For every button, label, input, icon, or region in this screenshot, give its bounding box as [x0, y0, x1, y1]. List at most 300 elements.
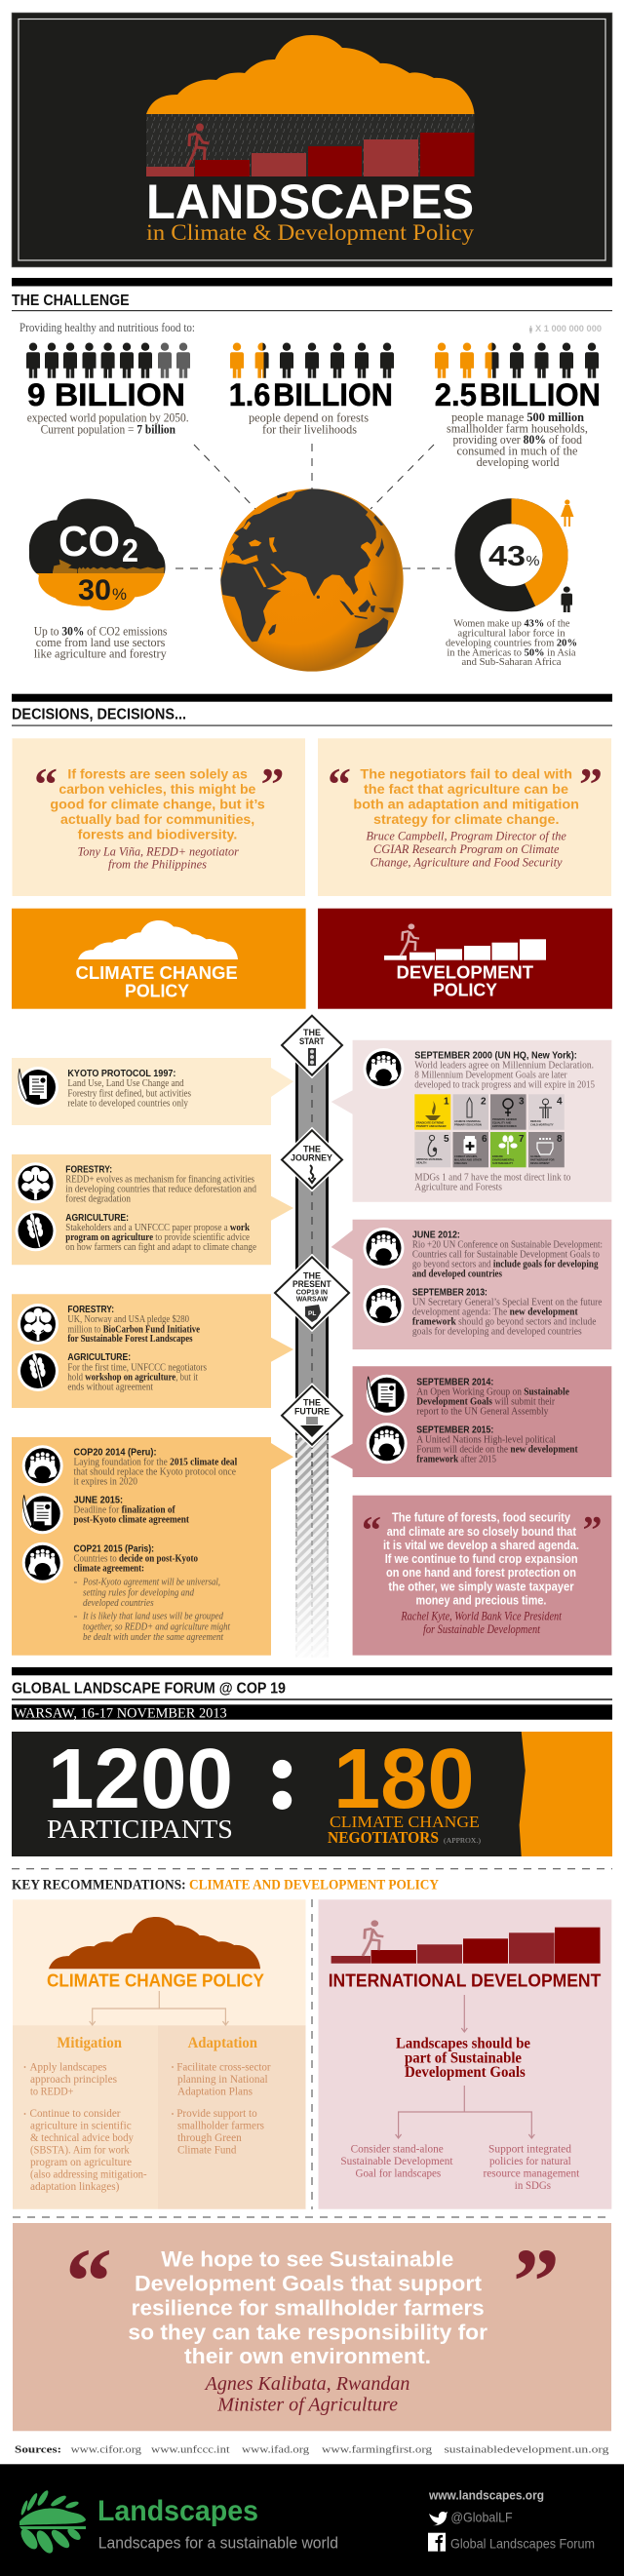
MDG 1 [414, 1094, 450, 1130]
panel: COP20 and COP21: that should replace the Kyoto protocol once [74, 1467, 236, 1478]
stat: 2.5 billion: smallholder farm households, [447, 421, 588, 435]
women text [446, 618, 577, 668]
column: adaptation: Climate Fund [177, 2142, 236, 2156]
icon: CO2 cloud: 2 [122, 532, 138, 568]
quote panel: Tony La Viña: good for climate change, but it’s [50, 797, 265, 812]
women text: and Sub-Saharan Africa [462, 656, 562, 668]
MDG 6: 6 [482, 1134, 488, 1145]
column: mitigation: Continue to consider [29, 2106, 121, 2120]
panel: future milestones: report to the UN General Assembly [416, 1407, 549, 1418]
icon: CO2 cloud: % [112, 585, 127, 604]
stat: 9 billion: Current population = 7 billion [41, 422, 176, 436]
milestone: the future: THE [303, 1398, 321, 1409]
panel: Rio+20 and Special Event: and developed countries [412, 1268, 502, 1279]
milestone: the journey: JOURNEY [291, 1152, 333, 1163]
milestone: the present [275, 1257, 349, 1329]
stat: 1.6 billion: 1.6 BILLION [229, 377, 393, 412]
column: mitigation: (SBSTA). Aim for work [30, 2142, 130, 2156]
icon: brown cloud [49, 1917, 260, 1969]
MDG 7: 7 [519, 1134, 525, 1145]
icon: tractor and crop silhouette [53, 560, 164, 573]
date banner: WARSAW, 16-17 NOVEMBER 2013 [14, 1705, 227, 1721]
milestone: the journey: THE [303, 1145, 321, 1155]
heading: key recommendations: KEY RECOMMENDATIONS: [12, 1877, 186, 1893]
women text: Women make up 43% of the [453, 618, 570, 630]
MDG 1: ERADICATE EXTREME [416, 1121, 444, 1125]
milestone: the journey [282, 1130, 342, 1189]
quote panel: Rachel Kyte: on one hand and forest protection on [386, 1565, 576, 1580]
CO2 text: Up to 30% of CO2 emissions [34, 625, 168, 639]
milestone: the present: THE [303, 1271, 321, 1282]
quote panel: Agnes Kalibata: Development Goals that support [135, 2271, 483, 2295]
quote panel: Rachel Kyte: Rachel Kyte, World Bank Vice President [401, 1610, 562, 1623]
panel: forestry and agriculture 1: in developing countries that reduce deforestation and [65, 1185, 257, 1195]
icon: Poland marker: PL [308, 1310, 316, 1317]
milestone: the start: START [299, 1036, 325, 1047]
sources: www.unfccc.int [151, 2443, 230, 2455]
CO2 text [34, 625, 168, 661]
panel: future milestones: Forum will decide on the new development [416, 1445, 578, 1456]
text: integrated policies: policies for natural [489, 2154, 571, 2167]
stat: 2.5 billion: developing world [477, 455, 560, 469]
icon: document and quill [22, 1493, 63, 1534]
panel: COP20 and COP21: post-Kyoto climate agreement [74, 1515, 189, 1526]
column: adaptation: through Green [177, 2130, 242, 2144]
MDG 1: POVERTY AND HUNGER [416, 1124, 447, 1128]
MDG 3: EQUALITY AND [492, 1121, 511, 1125]
stat panel: participants vs negotiators: 1200 [48, 1732, 233, 1826]
quote panel: Tony La Viña: Tony La Viña, REDD+ negotiator [78, 844, 239, 858]
column: adaptation: Adaptation Plans [177, 2084, 253, 2097]
panel: Rio+20 and Special Event: JUNE 2012: [412, 1229, 460, 1240]
stat panel: participants vs negotiators: (APPROX.) [444, 1837, 482, 1845]
stat: 2.5 billion: 2.5 BILLION [435, 377, 601, 412]
panel: Kyoto protocol: relate to developed countries only [67, 1098, 189, 1109]
icon: CO2 cloud: CO [58, 518, 120, 566]
stat: 9 billion: expected world population by 2050. [27, 411, 189, 425]
column: mitigation: to REDD+ [30, 2084, 74, 2097]
column: adaptation: smallholder farmers [177, 2118, 264, 2131]
panel: COP20 and COP21: COP21 2015 (Paris): [74, 1544, 154, 1555]
panel: Kyoto protocol: Land Use, Land Use Change and [67, 1078, 184, 1089]
MDG 5: HEALTH [416, 1160, 426, 1164]
stat: 1.6 billion: people depend on forests [249, 411, 369, 425]
panel: international development recommendations [318, 1899, 611, 2209]
footer: Landscapes for a sustainable world [98, 2533, 338, 2552]
footer: Landscapes [98, 2495, 258, 2527]
arrows: to two actions [396, 2086, 534, 2138]
quote panel: Bruce Campbell: Bruce Campbell, Program Director of the [367, 830, 566, 843]
MDG 8: DEVELOPMENT [530, 1161, 550, 1165]
panel: future milestones: An Open Working Group on Sustainable [416, 1387, 569, 1398]
milestone: the present: WARSAW [296, 1297, 328, 1304]
intro text: Providing healthy and nutritious food to: [20, 321, 195, 334]
stat: 1.6 billion: for their livelihoods [262, 422, 357, 436]
icon: winding road arrow [308, 1165, 316, 1183]
women text: developing countries from 20% [446, 638, 577, 649]
text: landscapes statement: Development Goals [405, 2064, 526, 2081]
milestone: the future: FUTURE [294, 1406, 330, 1417]
MDG 2: ACHIEVE UNIVERSAL [454, 1119, 482, 1123]
panel: Rio+20 and Special Event: Countries call for Sustainable Development Goals to [412, 1249, 600, 1260]
footer: @GlobalLF [450, 2510, 513, 2525]
icon: climbing figure [187, 123, 209, 167]
milestone: the future [282, 1386, 342, 1445]
quote panel: Bruce Campbell: The negotiators fail to deal with [360, 765, 572, 781]
quote panel: Rachel Kyte: “ [362, 1507, 381, 1552]
footer: Global Landscapes Forum [450, 2535, 595, 2551]
quote panel: Rachel Kyte: and climate are so closely bound that [387, 1524, 577, 1539]
panel: climate change policy: POLICY [125, 980, 190, 1000]
MDG 3: EMPOWER WOMEN [492, 1124, 517, 1128]
quote panel: Bruce Campbell: Change, Agriculture and Food Security [370, 855, 563, 869]
panel: international development recommendations: INTERNATIONAL DEVELOPMENT [329, 1971, 601, 1990]
column: mitigation: & technical advice body [30, 2130, 134, 2144]
stat: 1.6 billion [229, 343, 394, 436]
stat: 9 billion [26, 343, 190, 436]
icon: people arch [363, 1228, 404, 1268]
panel: COP20 and COP21: it expires in 2020 [74, 1477, 137, 1488]
sources: sustainabledevelopment.un.org [445, 2443, 609, 2455]
MDG 4: REDUCE [530, 1119, 541, 1123]
MDG 8: GLOBAL [530, 1154, 541, 1158]
quote panel: Rachel Kyte: it is vital we develop a shared agenda. [383, 1538, 579, 1552]
quote panel: Tony La Viña: If forests are seen solely as [67, 765, 248, 781]
icon: people arch [363, 1048, 404, 1089]
icon: rain hatch [146, 114, 474, 176]
panel: COP20 and COP21: Laying foundation for the 2015 climate deal [74, 1458, 237, 1468]
quote panel: Tony La Viña: carbon vehicles, this might be [58, 781, 256, 797]
panel: COP20 and COP21: Deadline for finalization of [74, 1505, 176, 1516]
panel: future milestones: SEPTEMBER 2014: [416, 1378, 493, 1388]
quote panel: Bruce Campbell: strategy for climate change. [373, 811, 560, 827]
panel: Rio+20 and Special Event: framework should go beyond sectors and include [412, 1316, 597, 1327]
column: mitigation: Mitigation [57, 2035, 122, 2051]
quote panel: Rachel Kyte: for Sustainable Development [423, 1622, 540, 1636]
panel: forestry and agriculture 1: Stakeholders and a UNFCCC paper propose a work [65, 1223, 250, 1233]
panel: future milestones: framework after 2015 [416, 1455, 496, 1465]
quote panel: Agnes Kalibata: so they can take responsibility for [128, 2320, 488, 2344]
panel: forestry and agriculture 2: hold workshop on agriculture, but it [67, 1373, 198, 1384]
icon: wheat [16, 1210, 57, 1251]
text: landscapes statement: Landscapes should be [396, 2036, 530, 2052]
MDG 7: ENSURE [492, 1154, 503, 1158]
quote panel: Bruce Campbell: the fact that agriculture can be [364, 781, 568, 797]
icon: CO2 cloud: 30 [78, 574, 111, 606]
panel: COP20 and COP21: developed countries [83, 1598, 154, 1609]
panel: Millennium Declaration [332, 1040, 611, 1202]
quote panel: Rachel Kyte: The future of forests, food security [392, 1510, 571, 1525]
MDG 3 [490, 1094, 526, 1130]
MDG 6: DISEASES [454, 1161, 467, 1165]
icon: people arch [363, 1285, 404, 1326]
MDG 1: 1 [444, 1096, 449, 1108]
panel: forestry and agriculture 1: program on agriculture to provide scientific advice [65, 1232, 250, 1243]
MDG 2: 2 [481, 1096, 487, 1108]
panel: climate change recommendations [13, 1899, 306, 2209]
MDG 8 [528, 1132, 565, 1167]
sources: www.farmingfirst.org [322, 2443, 433, 2455]
text: landscapes statement: part of Sustainable [405, 2049, 522, 2066]
panel: Rio+20 and Special Event: goals for developing and developed countries [412, 1326, 582, 1337]
icon: people arch [22, 1445, 63, 1486]
icon: CO2 cloud [29, 499, 166, 610]
globe [220, 488, 404, 672]
column: adaptation: Facilitate cross-sector [176, 2059, 271, 2073]
MDG 3: 3 [519, 1096, 525, 1108]
quote panel: Bruce Campbell: ” [579, 760, 603, 811]
sources: Sources: [15, 2443, 61, 2455]
dashed connector lines [176, 444, 451, 568]
MDG 7: SUSTAINABILITY [492, 1161, 514, 1165]
icon: maroon stairs [332, 1928, 601, 1964]
stat panel: participants vs negotiators: CLIMATE CHANGE [330, 1813, 480, 1831]
quote panel: Bruce Campbell: “ [328, 760, 351, 811]
stat panel: participants vs negotiators: PARTICIPANTS [47, 1815, 233, 1844]
column: mitigation: approach principles [30, 2072, 117, 2086]
panel: Rio+20 and Special Event: go beyond sectors and include goals for developing [412, 1259, 599, 1269]
quote panel: Rachel Kyte: money and precious time. [415, 1592, 546, 1607]
panel: Rio+20 and Special Event [332, 1220, 611, 1349]
panel: forestry and agriculture 1: FORESTRY: [65, 1165, 112, 1176]
panel: forestry and agriculture 2: million to BioCarbon Fund Initiative [67, 1324, 200, 1335]
MDG 5: 5 [444, 1134, 449, 1145]
MDG 3: PROMOTE GENDER [492, 1117, 517, 1121]
MDG 8: PARTNERSHIP FOR [530, 1158, 555, 1162]
panel: forestry and agriculture 2: For the first time, UNFCCC negotiators [67, 1363, 207, 1374]
title: LANDSCAPES [146, 175, 474, 229]
quote panel: Tony La Viña: actually bad for communities, [60, 811, 254, 827]
text: landscapes statement [396, 2036, 530, 2081]
heading: key recommendations: CLIMATE AND DEVELOPMENT POLICY [189, 1877, 439, 1893]
panel: forestry and agriculture 1: AGRICULTURE: [65, 1213, 129, 1224]
MDG 8: 8 [557, 1134, 563, 1145]
panel: Millennium Declaration: 8 Millennium Development Goals are later [414, 1070, 567, 1080]
panel: Rio+20 and Special Event: development agenda: The new development [412, 1307, 578, 1317]
panel: development policy: DEVELOPMENT [396, 961, 534, 982]
panel: forestry and agriculture 1 [12, 1154, 293, 1265]
MDG goal grid [414, 1094, 565, 1167]
quote panel: Bruce Campbell [318, 738, 611, 896]
MDG 2: PRIMARY EDUCATION [454, 1123, 482, 1127]
column: mitigation [24, 2035, 147, 2193]
legend: one figure equals one billion: X 1 000 000 000 [535, 324, 602, 334]
panel: Kyoto protocol [12, 1058, 293, 1125]
panel: Rio+20 and Special Event: SEPTEMBER 2013: [412, 1287, 488, 1298]
icon: document and quill [18, 1067, 58, 1108]
icon: wheat [18, 1350, 58, 1391]
icon: people arch [22, 1542, 63, 1583]
panel: forestry and agriculture 1: forest degradation [65, 1194, 132, 1205]
arrow: to sustainable development goals [461, 1995, 467, 2032]
column: adaptation: Provide support to [176, 2106, 257, 2120]
column: mitigation: program on agriculture [30, 2155, 132, 2168]
panel: future milestones: A United Nations High-level political [416, 1435, 556, 1446]
icon: people arch [367, 1423, 408, 1464]
text: integrated policies: resource management [484, 2166, 580, 2179]
panel: forestry and agriculture 2: for Sustainable Forest Landscapes [67, 1334, 193, 1345]
panel: Millennium Declaration: World leaders agree on Millennium Declaration. [414, 1060, 594, 1071]
panel: future milestones: Development Goals will submit their [416, 1397, 555, 1408]
icon: orange cloud [146, 35, 474, 114]
quote panel: Agnes Kalibata: resilience for smallholder farmers [132, 2295, 485, 2320]
stat: 2.5 billion: people manage 500 million [451, 410, 584, 424]
icon: twitter [429, 2512, 448, 2525]
panel: COP20 and COP21: COP20 2014 (Peru): [74, 1448, 156, 1459]
panel: forestry and agriculture 1: REDD+ evolves as mechanism for financing activities [65, 1175, 254, 1186]
panel: development policy [318, 909, 612, 1009]
icon: woman [561, 499, 573, 527]
header panel [12, 13, 612, 267]
sources: www.ifad.org [242, 2443, 310, 2455]
MDG 4 [528, 1094, 565, 1130]
milestone: the present: PRESENT [292, 1279, 332, 1290]
panel: forestry and agriculture 2: FORESTRY: [67, 1305, 114, 1315]
text: integrated policies: in SDGs [515, 2178, 551, 2192]
icon: landscapes logo [18, 2489, 86, 2556]
panel: Millennium Declaration: MDGs 1 and 7 have the most direct link to [414, 1173, 570, 1184]
text: stand-alone goal: Goal for landscapes [355, 2166, 442, 2179]
MDG 6 [452, 1132, 488, 1167]
panel: development policy: POLICY [433, 980, 498, 1000]
panel: COP20 and COP21: It is likely that land uses will be grouped [82, 1612, 224, 1622]
donut chart: 43% women: 43 [488, 541, 526, 572]
heading: key recommendations [12, 1877, 439, 1893]
panel: Kyoto protocol: KYOTO PROTOCOL 1997: [67, 1069, 176, 1079]
donut chart: 43% women: % [526, 553, 540, 569]
stat panel: participants vs negotiators [12, 1732, 612, 1856]
stat panel: participants vs negotiators: NEGOTIATORS [328, 1828, 439, 1847]
icon: tree [16, 1162, 57, 1203]
milestone: the start: THE [303, 1028, 321, 1038]
MDG 6: MALARIA AND OTHER [454, 1158, 482, 1162]
panel: COP20 and COP21: together, so REDD+ and agriculture might [83, 1621, 231, 1632]
panel: climate change policy: CLIMATE CHANGE [76, 962, 238, 983]
panel: COP20 and COP21: Post-Kyoto agreement will be universal, [82, 1578, 220, 1588]
icon: traffic light [308, 1048, 316, 1066]
panel: climate change policy [12, 909, 306, 1009]
panel: COP20 and COP21 [12, 1437, 293, 1656]
heading: decisions: DECISIONS, DECISIONS... [12, 706, 186, 722]
quote panel: Agnes Kalibata: Agnes Kalibata, Rwandan [204, 2373, 410, 2395]
stat: 2.5 billion [435, 343, 601, 469]
column: adaptation [172, 2035, 271, 2156]
date banner [12, 1704, 612, 1721]
panel: forestry and agriculture 1: on how farmers can fight and adapt to climate change [65, 1242, 256, 1253]
panel: forestry and agriculture 2: ends without agreement [67, 1383, 153, 1393]
quote panel: Tony La Viña: from the Philippines [108, 858, 207, 872]
panel: Millennium Declaration: developed to track progress and will expire in 2015 [414, 1079, 595, 1090]
stat: 2.5 billion: providing over 80% of food [452, 433, 583, 447]
panel: forestry and agriculture 2 [12, 1294, 293, 1408]
panel: COP20 and COP21: climate agreement: [74, 1564, 144, 1575]
text: integrated policies [484, 2141, 580, 2192]
icon: tree [18, 1304, 58, 1345]
panel: forestry and agriculture 2: AGRICULTURE: [67, 1352, 131, 1363]
panel: Rio+20 and Special Event: UN Secretary General’s Special Event on the future [412, 1297, 603, 1308]
stat: 2.5 billion: consumed in much of the [456, 445, 578, 458]
panel: COP20 and COP21: Countries to decide on post-Kyoto [74, 1554, 198, 1565]
quote panel: Rachel Kyte: If we continue to fund crop expansion [385, 1551, 578, 1566]
quote panel: Tony La Viña [12, 738, 305, 896]
column: mitigation: (also addressing mitigation- [30, 2166, 147, 2180]
milestone: the start [282, 1016, 342, 1075]
stat: 9 billion: 9 BILLION [27, 377, 185, 412]
MDG 5: IMPROVE MATERNAL [416, 1157, 443, 1161]
quote panel: Bruce Campbell: both an adaptation and mitigation [353, 797, 579, 812]
donut chart: 43% women [468, 498, 568, 606]
quote panel: Rachel Kyte: ” [583, 1507, 603, 1552]
rain lines [146, 114, 474, 176]
column: adaptation: planning in National [177, 2072, 268, 2086]
sources [15, 2443, 609, 2455]
sources: www.cifor.org [71, 2443, 142, 2455]
milestone: the present: COP19 IN [296, 1290, 328, 1297]
stat panel: participants vs negotiators: 180 [333, 1732, 474, 1826]
quote panel: Tony La Viña: forests and biodiversity. [78, 827, 237, 842]
MDG 2 [452, 1094, 488, 1130]
women text: agricultural labor force in [457, 628, 566, 640]
panel: COP20 and COP21: JUNE 2015: [74, 1496, 123, 1506]
MDG 4: CHILD MORTALITY [530, 1123, 554, 1127]
text: integrated policies: Support integrated [488, 2141, 571, 2155]
icon: man [562, 587, 572, 612]
panel: Millennium Declaration: SEPTEMBER 2000 (UN HQ, New York): [414, 1050, 577, 1061]
icon: facebook [428, 2533, 446, 2552]
panel: COP20 and COP21: be dealt with under the same agreement [83, 1632, 224, 1643]
women text: in the Americas to 50% in Asia [447, 646, 576, 658]
MDG 7 [490, 1132, 526, 1167]
quote panel: Agnes Kalibata: their own environment. [184, 2344, 431, 2368]
timeline road [294, 1058, 330, 1659]
text: stand-alone goal [340, 2141, 453, 2179]
column: mitigation: Apply landscapes [29, 2059, 107, 2073]
quote panel: Rachel Kyte [353, 1496, 611, 1656]
panel: climate change recommendations: CLIMATE CHANGE POLICY [47, 1971, 264, 1990]
icon: down arrow [300, 1418, 324, 1437]
panel: Millennium Declaration: Agriculture and Forests [414, 1183, 502, 1193]
MDG 7: ENVIRONMENTAL [492, 1158, 515, 1162]
text: stand-alone goal: Sustainable Development [340, 2154, 453, 2167]
quote panel: Rachel Kyte: the other, we simply waste taxpayer [388, 1579, 574, 1593]
section bar [12, 278, 612, 287]
text: stand-alone goal: Consider stand-alone [351, 2141, 444, 2155]
column: mitigation: adaptation linkages) [30, 2179, 119, 2193]
section bar [12, 694, 612, 702]
subtitle: in Climate & Development Policy [146, 220, 475, 245]
panel: forestry and agriculture 2: UK, Norway and USA pledge $280 [67, 1314, 189, 1325]
quote panel: Agnes Kalibata: “ [65, 2229, 112, 2333]
quote panel: Agnes Kalibata: Minister of Agriculture [216, 2394, 398, 2415]
MDG 6: COMBAT HIV/AIDS, [454, 1154, 478, 1158]
icon: white stairs [384, 939, 546, 960]
column: adaptation: Adaptation [188, 2035, 257, 2051]
icon: stairs [146, 133, 474, 176]
MDG 4: 4 [557, 1096, 563, 1108]
quote panel: Agnes Kalibata: We hope to see Sustainable [161, 2246, 453, 2271]
heading: global landscape forum: GLOBAL LANDSCAPE FORUM @ COP 19 [12, 1681, 286, 1698]
footer [0, 2464, 624, 2576]
quote panel: Bruce Campbell: CGIAR Research Program on Climate [373, 842, 560, 856]
quote panel: Agnes Kalibata: ” [513, 2229, 560, 2333]
heading: the challenge: THE CHALLENGE [12, 293, 130, 309]
column: mitigation: agriculture in scientific [30, 2118, 132, 2131]
icon: pink figure [401, 923, 419, 956]
CO2 text: come from land use sectors [36, 636, 166, 649]
panel: future milestones [331, 1366, 611, 1477]
CO2 text: like agriculture and forestry [34, 647, 167, 661]
section bar [12, 1667, 612, 1675]
